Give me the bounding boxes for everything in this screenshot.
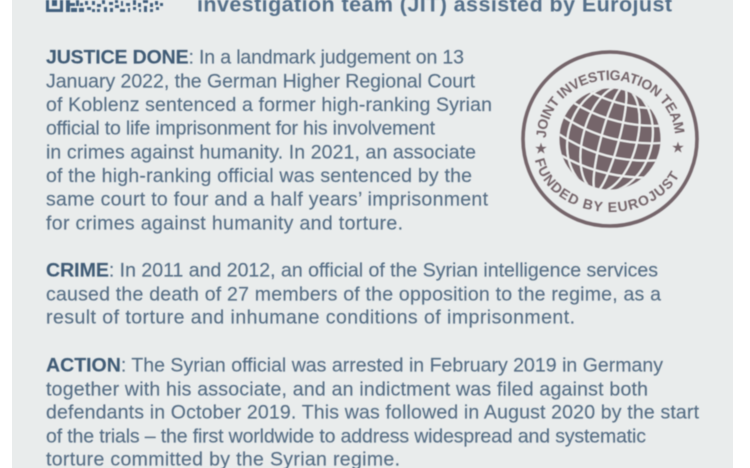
stamp globe xyxy=(558,88,662,190)
text block: justice done: JUSTICE DONE: In a landmark judgement on 13 xyxy=(46,47,464,69)
text block: justice done: official to life imprisonment for his involvement xyxy=(46,118,436,140)
text block: action xyxy=(46,355,700,468)
stamp text: bottom: FUNDED BY EUROJUST xyxy=(534,158,678,213)
text block: justice done: same court to four and a half years’ imprisonment xyxy=(46,189,489,211)
text block: crime: CRIME: In 2011 and 2012, an official of the Syrian intelligence services xyxy=(46,260,658,282)
text block: action: ACTION: The Syrian official was arrested in February 2019 in Germany xyxy=(46,355,663,377)
icon: QR code xyxy=(46,0,163,12)
icon: joint investigation team stamp xyxy=(520,50,700,228)
text block: crime xyxy=(46,260,661,329)
stamp text: top: JOINT INVESTIGATION TEAM xyxy=(536,70,685,138)
text block: justice done: of the high-ranking official was sentenced by the xyxy=(46,165,472,187)
text block: crime: caused the death of 27 members of the opposition to the regime, as a xyxy=(46,284,661,306)
stamp stars: ★ xyxy=(534,140,548,158)
text block: action: defendants in October 2019. This was followed in August 2020 by the start xyxy=(46,402,700,424)
text block: justice done: in crimes against humanity. In 2021, an associate xyxy=(46,142,476,164)
text block: justice done: of Koblenz sentenced a former high-ranking Syrian xyxy=(46,94,492,116)
stamp stars xyxy=(534,138,685,158)
text block: justice done: January 2022, the German Higher Regional Court xyxy=(46,71,476,93)
text block: action: together with his associate, and an indictment was filed against both xyxy=(46,379,648,401)
text block: crime: result of torture and inhumane conditions of imprisonment. xyxy=(46,307,575,329)
text block: justice done xyxy=(46,47,492,235)
stamp ring xyxy=(523,52,697,226)
text block: justice done: for crimes against humanity and torture. xyxy=(46,213,403,235)
stamp stars: ★ xyxy=(671,138,685,156)
text block: action: of the trials – the first worldwide to address widespread and systematic xyxy=(46,426,646,448)
